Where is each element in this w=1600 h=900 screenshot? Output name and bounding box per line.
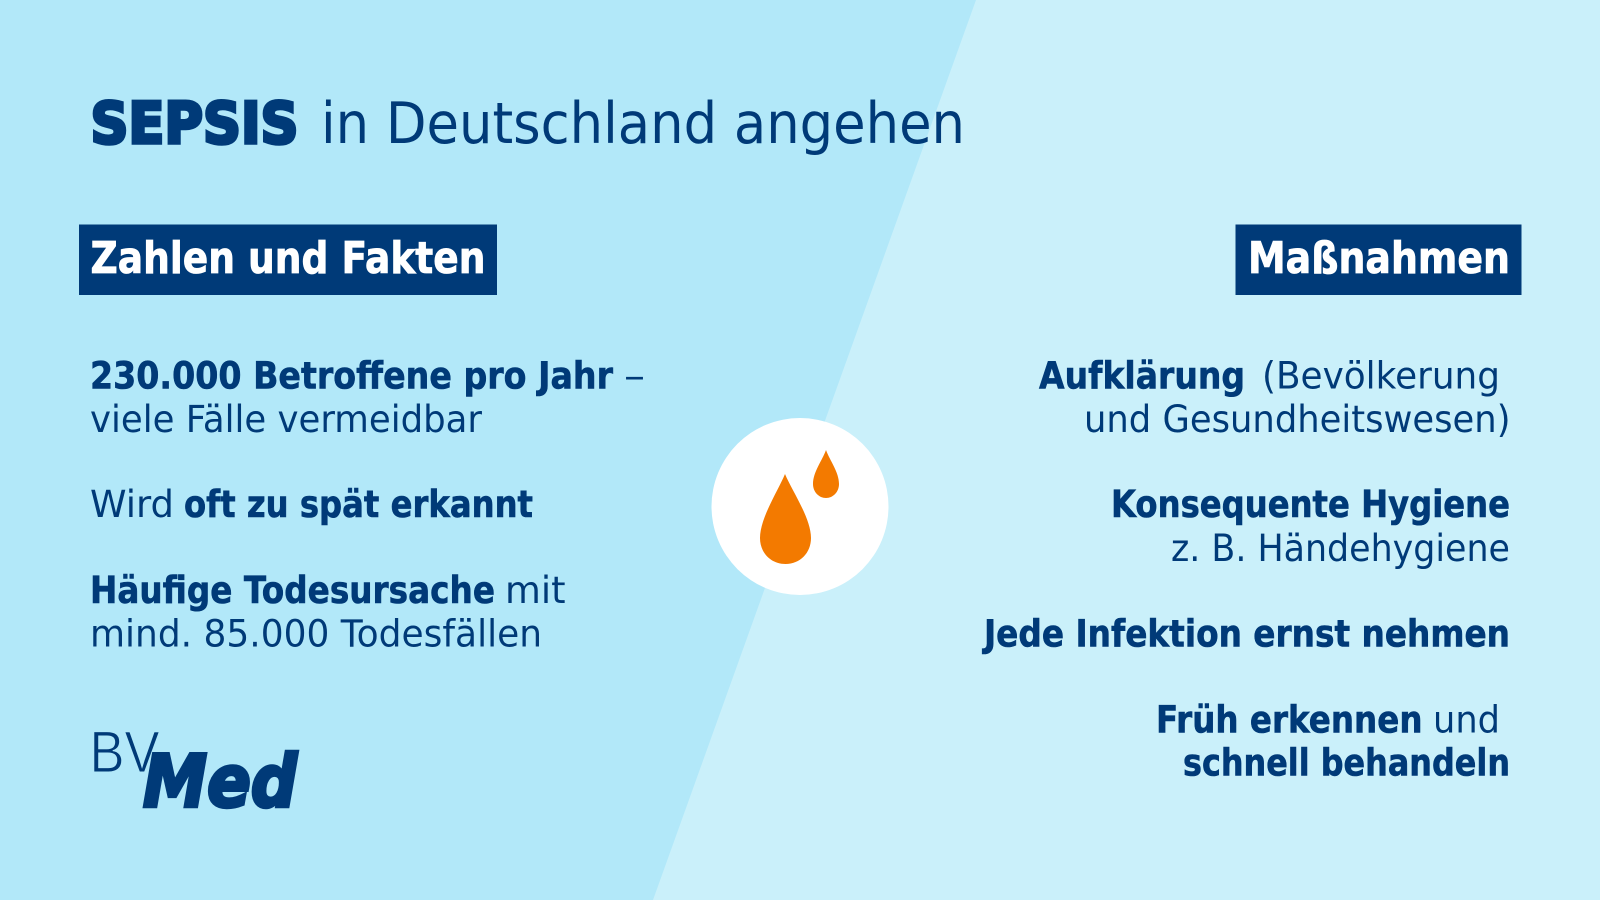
measure: early detection: Früh erkennen [1156,698,1422,742]
title [90,91,965,157]
measure: take every infection seriously: Jede Infektion ernst nehmen [981,612,1510,656]
measure: education [1039,354,1510,441]
facts text block [90,354,645,656]
fact: common cause of death: mit [505,568,566,612]
measure: early detection: schnell behandeln [1183,740,1510,784]
heading: Zahlen und Fakten: Zahlen und Fakten [90,233,486,284]
icon: blood drops in white circle [712,418,888,595]
measure: education: Aufklärung [1039,354,1245,398]
title: in Deutschland angehen [321,91,965,157]
heading: Maßnahmen [1236,224,1522,295]
measure: early detection [1156,698,1510,784]
fact: affected per year: – [624,354,645,398]
measure: hygiene: Konsequente Hygiene [1111,482,1510,526]
measure: education: und Gesundheitswesen) [1084,397,1510,441]
measure: education: (Bevölkerung [1262,354,1500,398]
fact: recognised too late: Wird [90,482,174,526]
heading: Zahlen und Fakten [79,224,497,295]
heading: Maßnahmen: Maßnahmen [1248,233,1510,284]
fact: common cause of death: mind. 85.000 Todesfällen [90,612,542,656]
big drop [760,474,811,564]
measure: hygiene: z. B. Händehygiene [1171,526,1510,570]
measure: hygiene [1111,482,1510,570]
title: SEPSIS [90,91,298,157]
measures text block [981,354,1510,784]
logo: BVMed: Med [143,740,298,824]
measure: early detection: und [1433,698,1500,742]
background: left diagonal panel [0,0,976,900]
fact: affected per year [90,354,645,441]
fact: recognised too late: oft zu spät erkannt [184,482,533,526]
fact: recognised too late [90,482,533,526]
fact: affected per year: 230.000 Betroffene pro Jahr [90,354,613,398]
logo: BVMed: BV [90,720,160,785]
fact: common cause of death [90,568,566,656]
fact: common cause of death: Häufige Todesursache [90,568,495,612]
fact: affected per year: viele Fälle vermeidbar [90,397,483,441]
logo: BVMed [90,720,298,824]
small drop [813,450,839,498]
